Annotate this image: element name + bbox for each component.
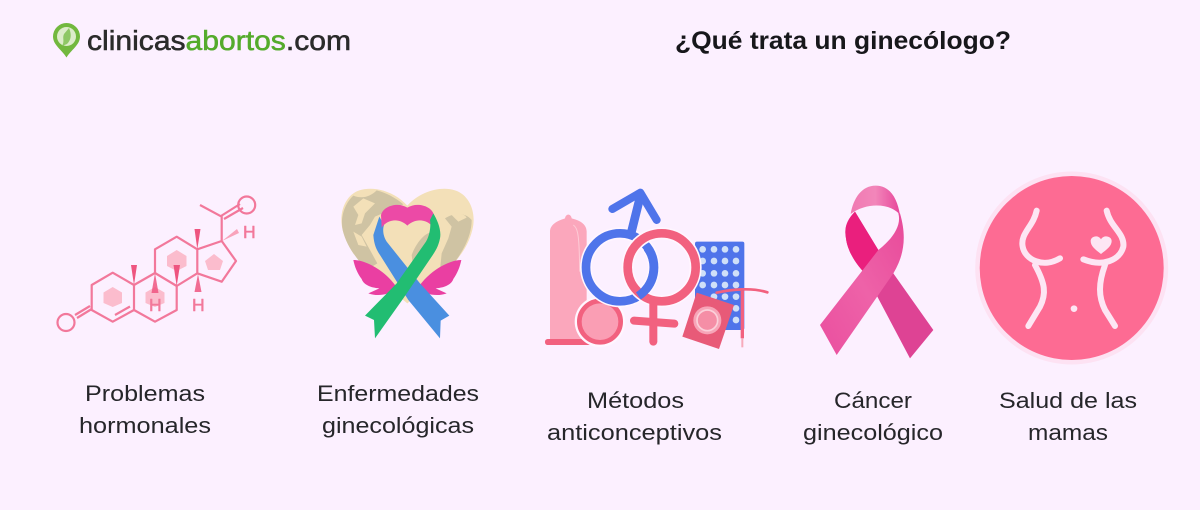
label: cancer ginecologico: ginecológico xyxy=(803,420,943,445)
label: cancer ginecologico: Cáncer xyxy=(834,388,913,413)
green ribbon band xyxy=(365,213,440,338)
hydrogen labels: H xyxy=(192,295,205,315)
interlocking blue arc xyxy=(638,248,654,296)
label: salud de las mamas: Salud de las xyxy=(999,388,1137,413)
icon: logo pin xyxy=(53,23,80,58)
ribbon front tail xyxy=(820,213,904,355)
icon: pink ribbon xyxy=(820,186,933,358)
panel: metodos anticonceptivos xyxy=(545,193,767,445)
ribbon back tail xyxy=(845,212,933,358)
panel: salud de las mamas xyxy=(975,172,1168,445)
blue ribbon band xyxy=(373,217,449,338)
condom xyxy=(545,215,591,345)
logo xyxy=(53,23,351,58)
label: enfermedades ginecologicas xyxy=(317,381,479,438)
panel: enfermedades ginecologicas xyxy=(317,189,479,438)
pink ribbon top xyxy=(381,205,434,228)
icon: steroid molecule xyxy=(58,196,256,331)
label: problemas hormonales: hormonales xyxy=(79,413,211,438)
female symbol xyxy=(628,233,696,342)
icon: globe heart with ribbon xyxy=(341,189,474,338)
contraceptive ring xyxy=(575,296,625,347)
label: salud de las mamas xyxy=(999,388,1137,445)
ribbon loop xyxy=(851,186,900,215)
label: metodos anticonceptivos: anticonceptivos xyxy=(547,420,722,445)
logo wordmark: clinicasabortos.com xyxy=(87,25,351,56)
label: problemas hormonales xyxy=(79,381,211,438)
IUD xyxy=(717,289,767,347)
condom packet xyxy=(682,293,734,349)
icon: contraceptives and gender symbols xyxy=(545,193,767,349)
pill blister xyxy=(695,242,744,330)
label: metodos anticonceptivos xyxy=(547,388,722,445)
panel: problemas hormonales xyxy=(58,196,256,438)
label: enfermedades ginecologicas: Enfermedades xyxy=(317,381,479,406)
title: ¿Qué trata un ginecólogo? xyxy=(675,27,1011,55)
pink leaves xyxy=(353,260,461,295)
hydrogen labels: H xyxy=(243,222,256,242)
label: problemas hormonales: Problemas xyxy=(85,381,205,406)
male symbol xyxy=(586,193,657,301)
hydrogen labels: H xyxy=(149,295,162,315)
label: salud de las mamas: mamas xyxy=(1028,420,1108,445)
label: enfermedades ginecologicas: ginecológicas xyxy=(322,413,474,438)
panel: cancer ginecologico xyxy=(803,186,943,445)
label: cancer ginecologico xyxy=(803,388,943,445)
icon: breast health circle xyxy=(975,172,1168,364)
label: metodos anticonceptivos: Métodos xyxy=(587,388,684,413)
hydrogen labels xyxy=(149,222,256,315)
